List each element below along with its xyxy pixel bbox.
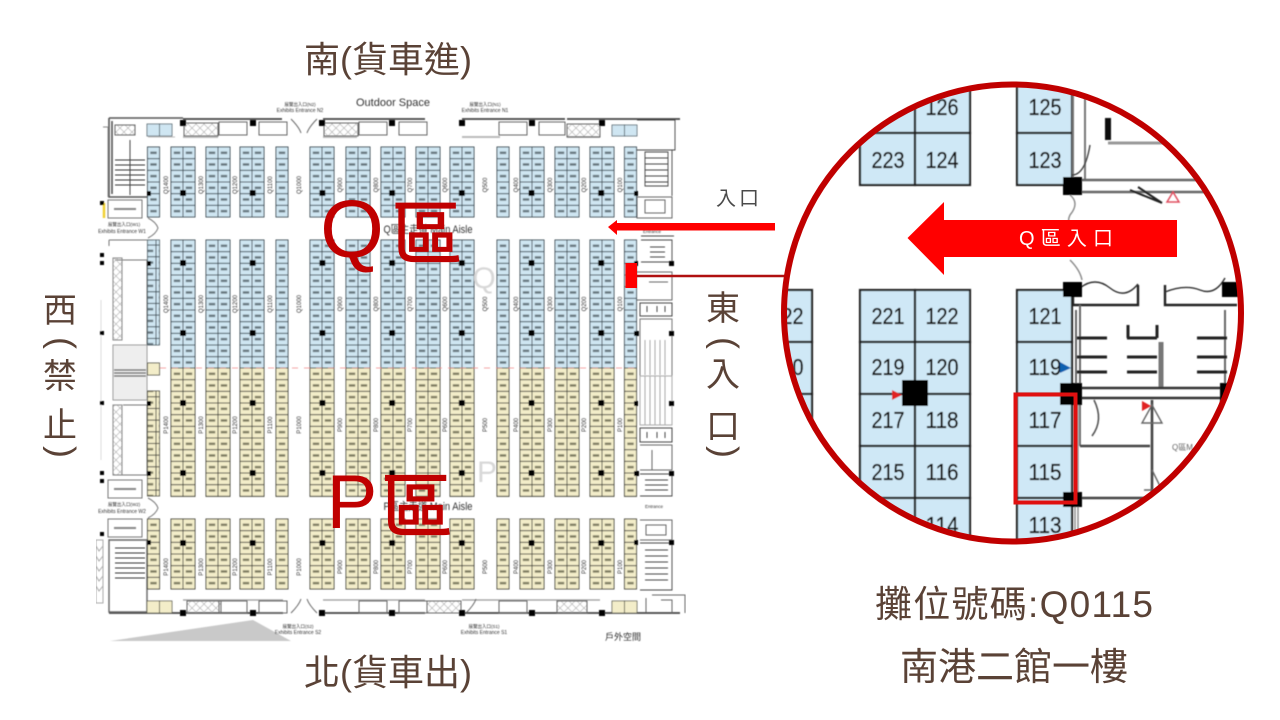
inset: magnified booth area	[760, 60, 1241, 550]
entrance labels east: Entrance	[643, 229, 662, 234]
column labels: P zone middle row: P1200	[233, 416, 239, 434]
heading: west side (vertical): 西	[43, 292, 77, 330]
column labels: Q zone top row: Q300	[548, 177, 554, 192]
column labels: P zone bottom row: P1300	[199, 558, 205, 576]
zone label: Q	[320, 184, 462, 275]
inset booth numbers: 223	[872, 147, 904, 173]
walls and cores	[96, 118, 685, 613]
heading: east side (vertical): 東	[706, 290, 740, 328]
inset booth numbers: 113	[1028, 512, 1062, 538]
booths: P zone bottom row	[148, 519, 636, 589]
inset highlight: booth Q0115	[1016, 394, 1076, 502]
inset booth numbers: 114	[926, 512, 959, 538]
booths: Q zone middle row	[148, 240, 636, 368]
inset booth numbers: 125	[1028, 94, 1062, 120]
column labels: P zone bottom row: P1400	[164, 558, 170, 576]
column labels: P zone middle row: P500	[483, 417, 489, 432]
inset booth numbers: 220	[770, 354, 804, 380]
inset booth numbers: 217	[872, 407, 904, 433]
column labels: Q zone middle row: Q600	[443, 296, 449, 311]
entrance label S2: 展覽出入口(S2)	[282, 623, 314, 630]
connector line to inset	[637, 275, 785, 277]
column labels: P zone bottom row: P400	[514, 559, 520, 574]
entrance label N1: Exhibits Entrance N1	[462, 108, 509, 114]
heading: west side (vertical): )	[43, 446, 84, 458]
column labels: P zone middle row: P1000	[297, 416, 303, 434]
zone label: P: P	[327, 460, 377, 545]
inset pillars	[902, 177, 1240, 507]
column labels: P zone middle row: P400	[514, 417, 520, 432]
outdoor space label top: Outdoor Space	[356, 97, 430, 109]
entrance label W2	[98, 501, 146, 515]
column labels: Q zone top row	[164, 175, 624, 194]
heading: west side (vertical)	[43, 292, 84, 458]
heading: north side: 北(貨車出)	[304, 652, 472, 693]
column labels: Q zone middle row: Q700	[408, 296, 414, 311]
main aisle label Q: Q區主走道 Main Aisle	[384, 222, 472, 236]
column labels: Q zone top row: Q200	[582, 177, 588, 192]
zone boundary dashes	[160, 367, 640, 369]
inset booth numbers: 123	[1028, 147, 1062, 173]
inset booth numbers: 122	[926, 303, 958, 329]
inset booth numbers: 119	[1028, 354, 1062, 380]
column labels: Q zone middle row: Q500	[483, 296, 489, 311]
column labels: P zone middle row	[164, 416, 624, 434]
faded zone letter P: P	[477, 456, 497, 489]
heading: west side (vertical): 止	[43, 407, 77, 445]
column labels: Q zone top row: Q1400	[164, 175, 170, 194]
zone label: P: 區	[381, 469, 453, 548]
column labels: P zone bottom row: P1000	[297, 558, 303, 576]
marker: booth position on map	[626, 263, 637, 288]
column labels: Q zone top row: Q800	[374, 177, 380, 192]
column labels: P zone bottom row: P100	[618, 559, 624, 574]
column labels: P zone bottom row	[164, 558, 624, 576]
heading: east side (vertical): )	[706, 446, 747, 458]
column labels: Q zone top row: Q100	[618, 177, 624, 192]
column labels: Q zone middle row: Q1100	[268, 295, 274, 313]
column labels: P zone middle row: P700	[408, 417, 414, 432]
entrance label W1: 展覽出入口(W1)	[108, 221, 141, 228]
inset booth numbers: 215	[872, 459, 904, 485]
inset booth numbers: 219	[872, 354, 904, 380]
entrance label S1: 展覽出入口(S1)	[468, 623, 500, 630]
heading: south side: 南(貨車進)	[304, 39, 472, 80]
label: entrance: 入口	[716, 188, 762, 210]
column labels: P zone bottom row: P1100	[268, 558, 274, 575]
heading: east side (vertical)	[706, 290, 747, 458]
small booths at corners	[147, 124, 637, 613]
inset booth numbers: 117	[1028, 407, 1062, 433]
heading: west side (vertical): (	[43, 337, 84, 349]
column labels: P zone bottom row: P200	[582, 559, 588, 574]
pillars	[100, 120, 674, 616]
entrance label W2: Exhibits Entrance W2	[98, 509, 146, 515]
inset booth numbers: 120	[926, 354, 958, 380]
column labels: Q zone middle row: Q400	[514, 296, 520, 311]
heading: west side (vertical): 禁	[43, 358, 77, 396]
entrance label N1: 展覽出入口(N1)	[469, 101, 501, 108]
column labels: P zone middle row: P900	[338, 417, 344, 432]
column labels: P zone bottom row: P700	[408, 559, 414, 574]
inset booth numbers: 121	[1028, 303, 1062, 329]
column labels: Q zone middle row	[164, 294, 624, 313]
column labels: P zone bottom row: P900	[338, 559, 344, 574]
column labels: Q zone middle row: Q1000	[297, 294, 303, 313]
zone label: Q: Q	[320, 184, 384, 275]
column labels: P zone middle row: P800	[374, 417, 380, 432]
entrance label W1: Exhibits Entrance W1	[98, 229, 146, 235]
entrance label N2: 展覽出入口(N2)	[284, 101, 316, 108]
inset small room label: Q區M	[1172, 443, 1193, 452]
entrance label N2: Exhibits Entrance N2	[277, 108, 324, 114]
column labels: Q zone top row: Q400	[514, 177, 520, 192]
column labels: P zone middle row: P200	[582, 417, 588, 432]
inset arrow: Q zone entrance: Q區入口	[1019, 228, 1113, 250]
zone label: Q: 區	[392, 196, 462, 274]
entrance label S2	[275, 623, 321, 636]
column labels: P zone middle row: P1300	[199, 416, 205, 434]
column labels: Q zone middle row: Q200	[582, 296, 588, 311]
column labels: Q zone top row: Q1200	[233, 175, 239, 194]
column labels: Q zone top row: Q900	[338, 177, 344, 192]
outdoor space label bottom: 戶外空間	[605, 631, 641, 642]
column labels: Q zone middle row: Q1400	[164, 294, 170, 313]
column labels: P zone bottom row: P500	[483, 559, 489, 574]
column labels: P zone middle row: P100	[618, 417, 624, 432]
entrance label S1: Exhibits Entrance S1	[461, 630, 507, 636]
entrance labels east: Entrance	[645, 504, 664, 509]
inset booth numbers: 126	[926, 94, 958, 120]
entrance label S1	[461, 623, 507, 636]
inset booth numbers: 221	[872, 303, 904, 329]
floor plan	[96, 97, 685, 642]
entrance labels east	[643, 229, 664, 509]
column labels: Q zone middle row: Q300	[548, 296, 554, 311]
column labels: P zone middle row: P1100	[268, 416, 274, 433]
caption: booth number: 攤位號碼:Q0115	[875, 584, 1153, 625]
column labels: Q zone top row: Q600	[443, 177, 449, 192]
inset arrow: Q zone entrance	[908, 202, 1177, 275]
inset small markers	[892, 192, 1179, 411]
inset booth numbers: 116	[926, 459, 958, 485]
column labels: Q zone middle row: Q100	[618, 296, 624, 311]
booths: P zone middle row	[148, 363, 636, 496]
inset booth numbers: 222	[770, 303, 804, 329]
column labels: P zone bottom row: P300	[548, 559, 554, 574]
column labels: Q zone middle row: Q900	[338, 296, 344, 311]
inset ring	[784, 84, 1241, 542]
column labels: P zone bottom row: P800	[374, 559, 380, 574]
inset booth numbers: 124	[926, 147, 959, 173]
arrow: entrance direction on map	[608, 220, 775, 235]
entrance label W2: 展覽出入口(W2)	[108, 501, 141, 508]
column labels: Q zone top row: Q1100	[268, 176, 274, 194]
entrance label S2: Exhibits Entrance S2	[275, 630, 321, 636]
column labels: P zone middle row: P600	[443, 417, 449, 432]
column labels: Q zone top row: Q1000	[297, 175, 303, 194]
heading: east side (vertical): 入	[706, 356, 740, 394]
inset booths	[787, 88, 1074, 538]
entrance label N1	[462, 101, 509, 114]
inset booth numbers: 115	[1028, 459, 1062, 485]
column labels: Q zone middle row: Q800	[374, 296, 380, 311]
column labels: Q zone top row: Q500	[483, 177, 489, 192]
inset building walls	[1069, 80, 1237, 540]
heading: east side (vertical): 口	[706, 408, 740, 446]
caption: venue: 南港二館一樓	[900, 647, 1128, 689]
inset booth numbers: 118	[926, 407, 958, 433]
entrance label N2	[277, 101, 324, 114]
main aisle label P: P區主走道 Main Aisle	[384, 499, 472, 513]
zone label: P	[327, 460, 453, 548]
entrance label W1	[98, 221, 146, 235]
decorative gray wedge under north wall	[110, 620, 291, 641]
column labels: P zone middle row: P300	[548, 417, 554, 432]
column labels: P zone bottom row: P600	[443, 559, 449, 574]
column labels: Q zone middle row: Q1200	[233, 294, 239, 313]
heading: east side (vertical): (	[706, 337, 747, 349]
booths: Q zone top row	[148, 147, 636, 217]
faded zone letter Q: Q	[472, 262, 496, 295]
column labels: Q zone top row: Q1300	[199, 175, 205, 194]
column labels: Q zone middle row: Q1300	[199, 294, 205, 313]
column labels: P zone bottom row: P1200	[233, 558, 239, 576]
column labels: Q zone top row: Q700	[408, 177, 414, 192]
column labels: P zone middle row: P1400	[164, 416, 170, 434]
inset booth numbers	[770, 94, 1062, 538]
